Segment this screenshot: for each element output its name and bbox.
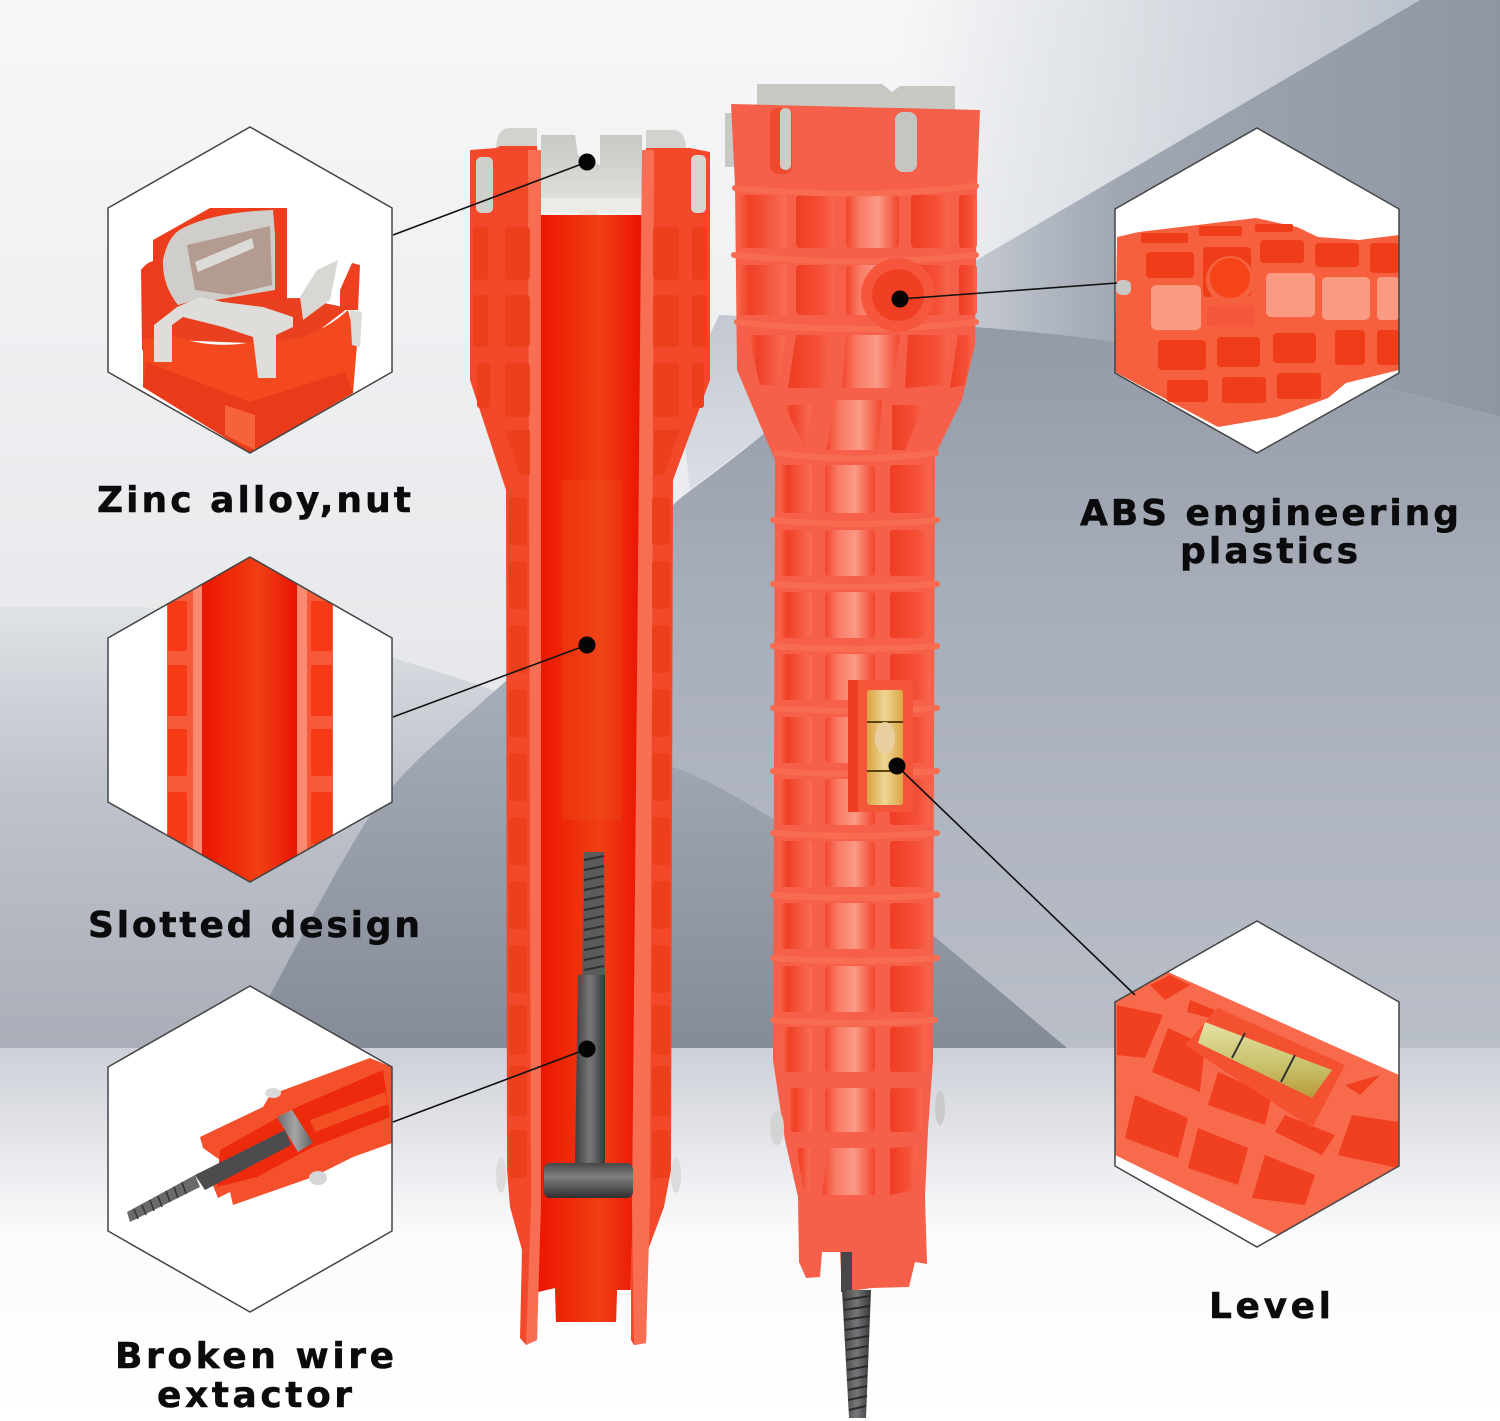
side windows: [473, 227, 707, 1178]
label: slotted design: Slotted design: [88, 905, 420, 946]
ribs: [734, 186, 976, 1023]
label: broken wire extactor: [115, 1336, 394, 1416]
hexagon: ABS engineering plastics: [1115, 128, 1399, 453]
pins: [476, 157, 493, 213]
screws: [770, 1111, 784, 1145]
hexagon: zinc alloy nut: [108, 127, 392, 453]
hexagon: level: [1105, 921, 1399, 1247]
top slots: [770, 108, 792, 174]
hexagon: broken wire extractor: [108, 986, 392, 1312]
level vial: [848, 680, 913, 812]
label: ABS engineering plastics: plastics: [1180, 531, 1358, 572]
label: broken wire extactor: extactor: [157, 1375, 352, 1416]
label: zinc alloy nut: Zinc alloy,nut: [97, 480, 411, 521]
round boss: [861, 258, 935, 332]
left tool: open channel view: [470, 128, 710, 1345]
threaded bolt: [841, 1252, 871, 1418]
rails: [526, 150, 541, 1345]
hexagon: slotted design: [108, 557, 392, 887]
label: ABS engineering plastics: ABS engineering: [1080, 493, 1459, 534]
right tool: ribbed grip view: [725, 84, 980, 1418]
silver nut top: [496, 128, 686, 220]
head windows: [737, 195, 812, 450]
silver top: [757, 84, 955, 110]
label: broken wire extactor: Broken wire: [115, 1336, 394, 1377]
extractor T-handle: [544, 852, 633, 1198]
callout lines and dots: [393, 154, 1135, 1122]
body silhouette: [731, 104, 980, 1292]
screws: [496, 1157, 506, 1193]
label: ABS engineering plastics: [1080, 493, 1459, 572]
label: level: Level: [1209, 1286, 1331, 1327]
orange body: [470, 146, 710, 1345]
inner channel: [538, 215, 641, 1322]
